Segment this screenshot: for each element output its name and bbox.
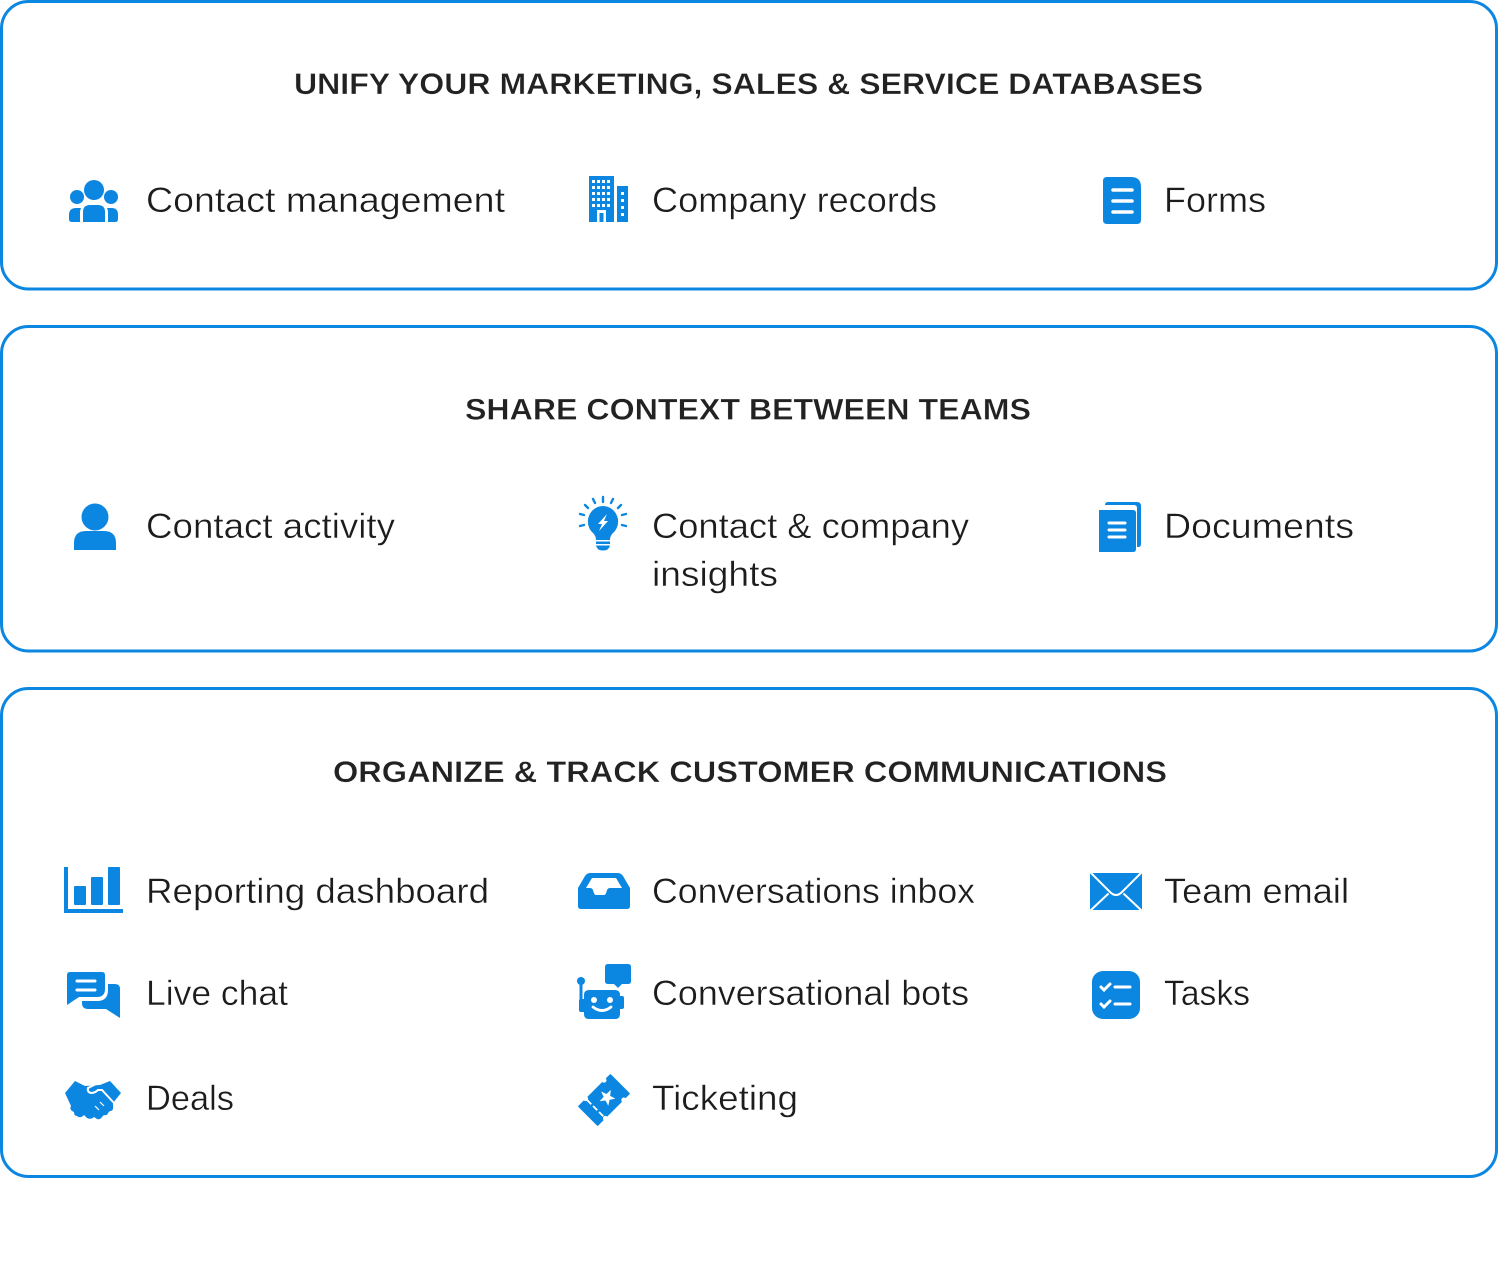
label: conversations inbox: Conversations inbox [652, 872, 976, 911]
label: reporting dashboard: Reporting dashboard [146, 872, 489, 911]
panel: unify databases [2, 2, 1496, 289]
icon: form document [1103, 177, 1141, 224]
label: company records: Company records [652, 181, 937, 220]
label: team email: Team email [1164, 872, 1349, 911]
label: contact and company insights [652, 507, 970, 594]
panel: share context [2, 326, 1496, 651]
heading: share context: SHARE CONTEXT BETWEEN TEAMS [465, 394, 1031, 426]
icon: inbox [578, 873, 630, 909]
label: live chat: Live chat [146, 974, 288, 1013]
icon: chat bubbles [67, 972, 120, 1018]
icon: envelope [1090, 873, 1142, 910]
icon: bar chart [64, 867, 123, 913]
icon: building [589, 176, 628, 222]
icon: handshake [65, 1081, 121, 1119]
icon: ticket [576, 1072, 632, 1128]
heading: unify databases: UNIFY YOUR MARKETING, SALES & SERVICE DATABASES [294, 68, 1203, 101]
icon: light bulb [580, 497, 626, 550]
icon: chatbot [577, 964, 631, 1019]
label: conversational bots: Conversational bots [652, 974, 969, 1013]
label: ticketing: Ticketing [652, 1079, 798, 1118]
icon: people [69, 180, 118, 222]
icon: person [74, 504, 116, 550]
heading: organize and track: ORGANIZE & TRACK CUSTOMER COMMUNICATIONS [333, 756, 1167, 789]
label: forms: Forms [1164, 181, 1266, 220]
label: contact management: Contact management [146, 181, 505, 220]
label: documents: Documents [1164, 507, 1354, 546]
label: contact and company insights: insights [652, 555, 778, 594]
label: tasks: Tasks [1164, 974, 1250, 1013]
icon: documents [1099, 502, 1141, 552]
label: deals: Deals [146, 1079, 234, 1118]
label: contact activity: Contact activity [146, 507, 396, 546]
label: contact and company insights: Contact & company [652, 507, 970, 546]
panel: organize and track [2, 688, 1496, 1176]
icon: task list [1092, 971, 1140, 1019]
